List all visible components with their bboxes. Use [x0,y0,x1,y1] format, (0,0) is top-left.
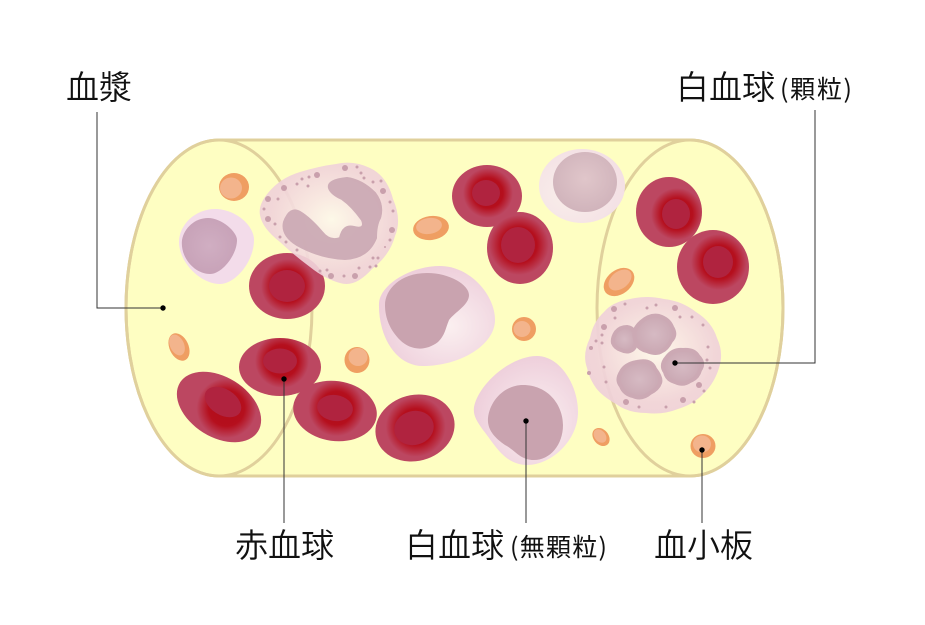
label: plasma: 血漿 [66,69,132,106]
red blood cells [164,165,749,470]
white blood cell: agranulocyte center [379,266,495,366]
white blood cell: agranulocyte bottom [474,356,578,465]
leader line: granulocyte [672,110,815,366]
label: agranulocyte [405,527,607,564]
granules [587,302,712,408]
plasma cylinder [126,140,783,476]
leader line: platelet [699,447,705,523]
white blood cell: agranulocyte top right [539,149,625,223]
label: agranulocyte: 白血球 [405,527,504,564]
white blood cell: agranulocyte left [179,209,254,284]
label: granulocyte: (顆粒) [780,70,852,106]
nucleus lobes [613,316,702,397]
label: red blood cell: 赤血球 [235,527,334,564]
leader line: plasma [97,112,166,311]
label: agranulocyte: (無顆粒) [510,528,607,564]
label: platelet: 血小板 [654,527,753,564]
leader line: red blood cell [281,376,287,523]
label: granulocyte [676,69,852,106]
white blood cell: granulocyte top left [260,163,398,284]
platelets [164,173,716,458]
label: granulocyte: 白血球 [676,69,775,106]
leader line: agranulocyte [523,418,529,523]
granules [262,165,395,279]
white blood cell: granulocyte right (multilobed) [585,297,721,414]
